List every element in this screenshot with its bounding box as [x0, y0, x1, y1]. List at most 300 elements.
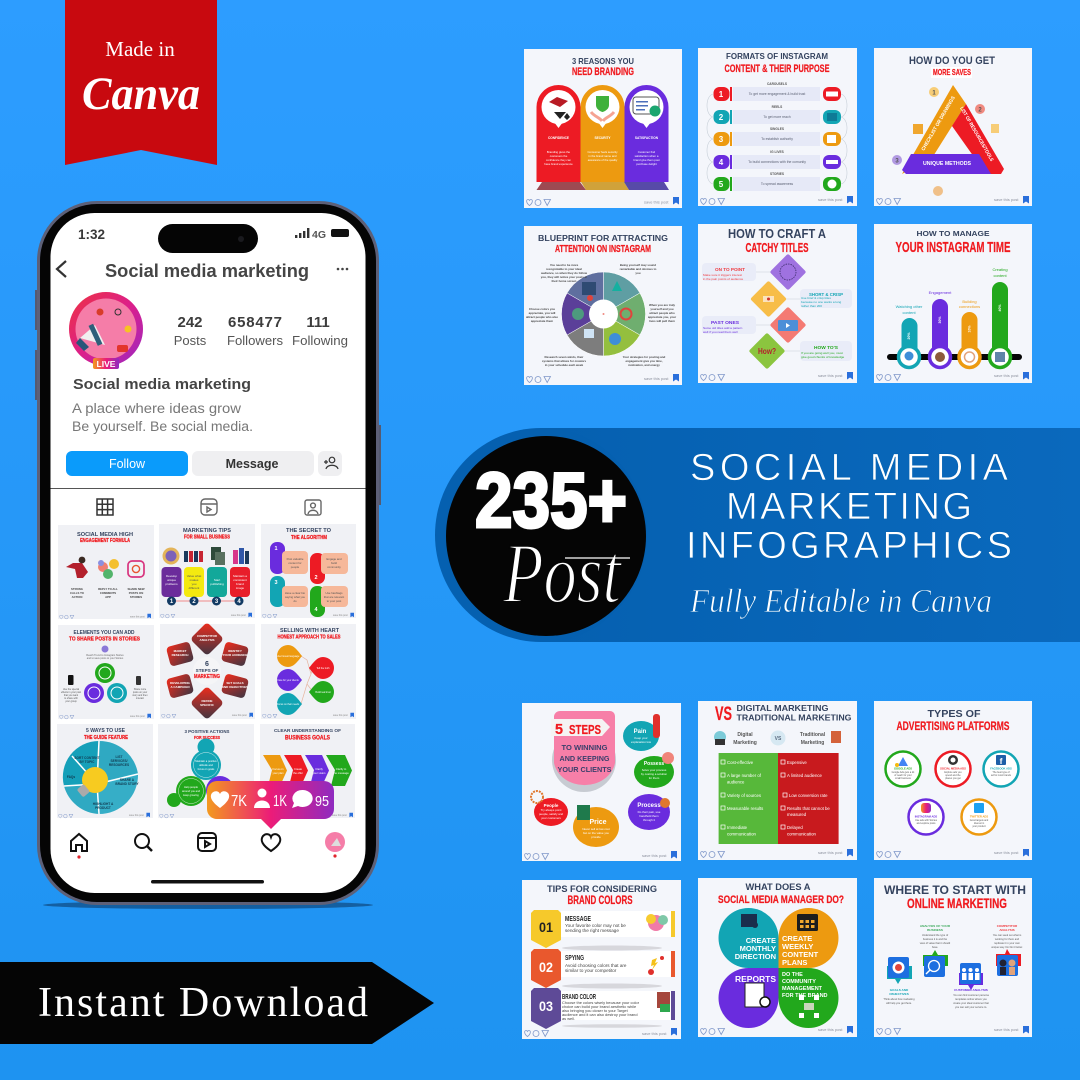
profile buttons: Message: [226, 457, 278, 471]
panel: tips for considering brand colors: 01: [539, 919, 553, 935]
mini post: 6 steps of marketing: MARKETING: [194, 674, 220, 680]
mini post: elements you can add: TO SHARE POSTS IN STORIES: [69, 636, 140, 642]
panel: digital vs traditional marketing: save this post: [818, 850, 843, 855]
panel: how do you get more saves: save this post: [994, 197, 1019, 202]
panel: tips for considering brand colors: 02: [539, 959, 553, 975]
panel: how to craft catchy titles: Make sure it triggers interest: [703, 273, 742, 277]
mini post: the secret to the algorithm: content for: [288, 561, 302, 565]
mini post: social media high engagement: REPLY TO ALL: [98, 587, 118, 591]
bottom navigation: [71, 832, 345, 859]
panel: formats of Instagram content: 5: [719, 180, 724, 189]
panel: 3 reasons you need branding: save this post: [644, 200, 669, 204]
mini post: marketing tips: FOR SMALL BUSINESS: [184, 534, 230, 540]
mini post: 6 steps of marketing: YOUR AUDIENCE: [222, 653, 248, 657]
mini post: 3 positive actions: 3 POSITIVE ACTIONS: [184, 729, 230, 735]
panel: 5 steps winning clients: through it: [643, 818, 655, 822]
panel: 3 reasons you need branding: have brand experience: [544, 162, 573, 166]
panel: formats of Instagram content: 2: [719, 113, 724, 122]
mini post: business goals: BUSINESS GOALS: [285, 736, 330, 742]
mini post: social media high engagement: APP: [105, 595, 111, 599]
panel: 5 steps winning clients: Process: [637, 803, 661, 809]
panel: formats of Instagram content: CONTENT & THEIR PURPOSE: [724, 63, 830, 75]
panel: blueprint for attracting attention: yourself and you: [650, 307, 674, 311]
mini post: 6 steps of marketing: DEVELOPING: [170, 681, 191, 685]
panel: how do you get more saves: CHECKLIST OR DRAWINGS: [921, 95, 957, 152]
avatar: [69, 292, 143, 369]
panel: tips for considering brand colors: BRAND COLOR: [562, 994, 596, 1001]
panel: 5 steps winning clients: Try always point: [541, 808, 562, 812]
panel: where to start with online marketing: create your ideal customer that: [953, 1001, 989, 1005]
panel: tips for considering brand colors: similar to your competitor: [565, 968, 617, 973]
mini post: social media high engagement: SOCIAL MEDIA HIGH: [77, 532, 133, 538]
panel: types of advertising platforms: interest in: [974, 822, 985, 825]
banner title: MARKETING: [726, 486, 972, 528]
panel: types of advertising platforms: GOOGLE ADS: [894, 766, 912, 770]
mini post: the secret to the algorithm: save this post: [333, 614, 348, 617]
panel: formats of Instagram content: STORIES: [770, 172, 784, 176]
panel: digital vs traditional marketing: Expensive: [787, 760, 807, 765]
mini post: the secret to the algorithm: to your post: [327, 599, 342, 603]
profile stats: 111: [306, 314, 330, 331]
panel: blueprint for attracting attention: motivation, and energy: [628, 363, 660, 367]
panel: blueprint for attracting attention: save this post: [644, 376, 669, 381]
panel: how to manage Instagram time: HOW TO MANAGE: [916, 229, 990, 238]
mini post: marketing tips: makes: [190, 578, 199, 582]
panel: how to craft catchy titles: Some old titles add a pattern: [703, 326, 743, 330]
panel: what does a social media manager do: DIRECTION: [735, 952, 776, 961]
mini post: 6 steps of marketing: MARKET: [174, 649, 187, 653]
mini post: the secret to the algorithm: 3: [274, 580, 278, 586]
mini post: the secret to the algorithm: saying what you: [285, 595, 305, 599]
mini post: marketing tips: different: [189, 586, 200, 590]
panel: how to manage Instagram time: save this post: [994, 373, 1019, 378]
panel: digital vs traditional marketing: Marketing: [801, 740, 824, 746]
mini post: 3 positive actions: Maintain a positive: [195, 759, 217, 763]
mini post: 6 steps of marketing: 6: [205, 661, 209, 668]
mini post: elements you can add: Use the special: [63, 688, 80, 691]
profile stats: Posts: [174, 333, 207, 348]
mini post: 6 steps of marketing: SET GOALS: [226, 681, 244, 685]
mini post: 5 ways to use the guide feature: THE GUIDE FEATURE: [84, 735, 128, 741]
panel: where to start with online marketing: WHERE TO START WITH: [884, 885, 1026, 897]
panel: how do you get more saves: [874, 48, 1032, 206]
panel: 5 steps winning clients: Never sell at low cost: [582, 827, 610, 831]
mini post: 3 positive actions: keep growing: [183, 793, 199, 797]
panel: formats of Instagram content: CAROUSELS: [767, 82, 787, 86]
panel: how to manage Instagram time: 40%: [998, 304, 1002, 312]
mini post: the secret to the algorithm: 2: [314, 575, 318, 581]
panel: blueprint for attracting attention: BLUEPRINT FOR ATTRACTING: [538, 234, 668, 243]
mini post: elements you can add: posts on your: [133, 691, 147, 694]
ribbon: Made in Canva: [65, 0, 217, 165]
panel: formats of Instagram content: REELS: [772, 105, 782, 109]
panel: digital vs traditional marketing: Results that cannot be: [787, 806, 830, 811]
panel: how to manage Instagram time: 10%: [968, 325, 972, 333]
panel: how to craft catchy titles: because no one wants a long: [801, 300, 842, 304]
mini post: the secret to the algorithm: Post valuable: [287, 557, 304, 561]
panel: blueprint for attracting attention: lives will pull them: [649, 319, 675, 323]
panel: where to start with online marketing: COMPETITOR: [997, 924, 1018, 928]
panel: tips for considering brand colors: BRAND COLORS: [568, 893, 632, 907]
panel: where to start with online marketing: business it is and the: [923, 937, 948, 941]
panel: 5 steps winning clients: [522, 703, 681, 861]
panel: where to start with online marketing: ONLINE MARKETING: [907, 895, 1007, 911]
mini post: marketing tips: 3: [215, 599, 219, 605]
ribbon: Made in Canva: Made in: [105, 37, 175, 61]
panel: types of advertising platforms: FACEBOOK ADS: [990, 766, 1012, 770]
panel: how to craft catchy titles: If you are going well you, must: [801, 351, 843, 355]
panel: 5 steps winning clients: your customers: [541, 816, 561, 820]
panel: digital vs traditional marketing: Delayed: [787, 825, 803, 830]
banner: instant download arrow: [0, 962, 434, 1044]
mini post: 5 ways to use the guide feature: LIST: [116, 755, 123, 759]
panel: digital vs traditional marketing: DIGITAL MARKETING: [736, 703, 829, 713]
panel: 3 reasons you need branding: purchase delight: [636, 162, 657, 166]
mini post: 5 ways to use the guide feature: PRODUCT: [95, 806, 111, 810]
badge: 235+ post: [446, 436, 646, 636]
panel: blueprint for attracting attention: appreciate you, your: [648, 315, 677, 319]
mini post: the secret to the algorithm: do: [293, 599, 297, 603]
panel: types of advertising platforms: of reach for your: [894, 774, 912, 777]
mini post: 5 ways to use the guide feature: RESOURCES: [109, 763, 129, 767]
panel: digital vs traditional marketing: Traditional: [800, 732, 826, 738]
mini post: business goals: the offer: [293, 771, 303, 775]
engagement popup: 7K: [231, 793, 247, 810]
phone mockup: [35, 201, 381, 909]
panel: tips for considering brand colors: TIPS FOR CONSIDERING: [547, 884, 657, 894]
mini post: marketing tips: save this post: [231, 614, 246, 617]
mini post: marketing tips: [159, 524, 255, 618]
panel: types of advertising platforms: save this post: [994, 850, 1019, 855]
panel: how to manage Instagram time: 20%: [907, 332, 911, 340]
panel: where to start with online marketing: save this post: [994, 1027, 1019, 1032]
panel: blueprint for attracting attention: attract people who: [649, 311, 675, 315]
panel: digital vs traditional marketing: Marketing: [733, 740, 757, 746]
mini post: the secret to the algorithm: THE ALGORITHM: [291, 535, 327, 541]
panel: what does a social media manager do: CONTENT: [782, 950, 819, 959]
mini post: the secret to the algorithm: build: [331, 561, 337, 565]
panel: blueprint for attracting attention: You need to be more: [550, 263, 579, 267]
mini post: elements you can add: story and then: [132, 694, 148, 697]
mini post: marketing tips: brand: [236, 582, 244, 586]
mini post: elements you can add: Reach Trend to Instagram Stories: [86, 654, 124, 657]
status bar: [78, 224, 349, 253]
mini post: marketing tips: you: [192, 582, 197, 586]
panel: 5 steps winning clients: but on the value you: [583, 831, 609, 835]
panel: 3 reasons you need branding: Branding gives the: [547, 150, 571, 154]
mini post: the secret to the algorithm: Have a clear bio: [285, 591, 306, 595]
ribbon: Made in Canva: Canva: [82, 68, 200, 120]
mini post: 6 steps of marketing: DEFINE: [201, 699, 213, 703]
panel: blueprint for attracting attention: remarkable and obvious to: [620, 267, 657, 271]
mini post: selling with heart: Care for your clients: [277, 679, 299, 682]
panel: types of advertising platforms: The best type of: [992, 771, 1010, 774]
mini post: the secret to the algorithm: that are relevant: [324, 595, 344, 599]
panel: where to start with online marketing: You can seek out what is: [993, 933, 1022, 937]
panel: types of advertising platforms: ad for most brands: [991, 774, 1012, 777]
panel: where to start with online marketing: unique way. Do Do it better.: [991, 945, 1023, 949]
panel: formats of Instagram content: To get more engagement & build trust: [749, 92, 805, 96]
mini post: 3 positive actions: FOR SUCCESS: [194, 735, 221, 741]
panel: 5 steps winning clients: people, satisfy and: [539, 812, 563, 816]
panel: where to start with online marketing: view of value that it should: [920, 941, 951, 945]
panel: digital vs traditional marketing: Measurable results: [727, 806, 763, 811]
panel: tips for considering brand colors: sending the right message: [565, 928, 619, 933]
panel: where to start with online marketing: working for them and: [995, 937, 1020, 941]
panel: tips for considering brand colors: SPYING: [565, 955, 584, 962]
panel: digital vs traditional marketing: Digital: [737, 732, 753, 738]
mini post: 6 steps of marketing: STEPS OF: [196, 668, 219, 673]
mini post: business goals: CLEAR UNDERSTANDING OF: [274, 728, 341, 734]
mini post: social media high engagement: SHARE NEW: [127, 587, 145, 591]
panel: 5 steps winning clients: People: [544, 803, 559, 808]
panel: types of advertising platforms: ADVERTISING PLATFORMS: [896, 719, 1010, 733]
panel: what does a social media manager do: SOCIAL MEDIA MANAGER DO?: [718, 894, 844, 906]
panel: how to manage Instagram time: 30%: [938, 316, 942, 324]
panel: how to craft catchy titles: rather than 200: [801, 304, 822, 308]
panel: types of advertising platforms: [874, 701, 1032, 860]
panel: 3 reasons you need branding: SATISFACTION: [635, 136, 659, 140]
panel: what does a social media manager do: MANAGEMENT: [782, 986, 823, 992]
panel: how to craft catchy titles: CATCHY TITLES: [746, 241, 808, 255]
mini post: the secret to the algorithm: people: [291, 565, 300, 569]
mini post: business goals: your plan: [272, 771, 284, 775]
mini post: 5 ways to use the guide feature: SHARE A: [120, 778, 135, 782]
panel: 3 reasons you need branding: 3 REASONS YOU: [572, 56, 634, 66]
panel: types of advertising platforms: Explore ads you: [944, 771, 962, 774]
mini post: the secret to the algorithm: Engage and: [326, 557, 342, 561]
panel: types of advertising platforms: TWITTER ADS: [970, 814, 988, 818]
panel: how do you get more saves: 1: [932, 90, 936, 96]
banner: instant download arrow: Instant Download: [38, 980, 368, 1026]
mini post: 3 positive actions: attitude and: [199, 763, 213, 767]
panel: digital vs traditional marketing: TRADITIONAL MARKETING: [736, 712, 852, 722]
profile stats: [174, 314, 348, 348]
panel: what does a social media manager do: PLANS: [782, 958, 807, 967]
panel: tips for considering brand colors: Your favorite color may not be: [565, 923, 626, 928]
panel: how to craft catchy titles: well if you read them well: [703, 330, 738, 334]
panel: how do you get more saves: MORE SAVES: [933, 67, 971, 77]
mini post: 6 steps of marketing: A CAMPAIGN: [170, 685, 190, 689]
mini post: business goals: Focus on: [272, 767, 284, 771]
panel: what does a social media manager do: WEEKLY: [782, 942, 813, 951]
panel: digital vs traditional marketing: A large number of: [727, 773, 762, 778]
mini post: 5 ways to use the guide feature: HIGHLIGHT A: [93, 802, 114, 806]
panel: how do you get more saves: 2: [978, 108, 982, 114]
phone body: [35, 201, 381, 909]
panel: 5 steps winning clients: for them: [649, 776, 660, 780]
banner title: SOCIAL MEDIA: [690, 447, 1009, 489]
panel: 5 steps winning clients: YOUR CLIENTS: [558, 765, 612, 774]
panel: how to craft catchy titles: ON TO POINT: [715, 267, 745, 272]
panel: how to manage Instagram time: [874, 224, 1032, 383]
panel: 5 steps winning clients: TO WINNING: [562, 743, 608, 752]
panel: tips for considering brand colors: save this post: [642, 1031, 667, 1036]
mini post: social media high engagement: COMMENTS: [100, 591, 116, 595]
panel: where to start with online marketing: OBJECTIVES: [889, 992, 909, 996]
mini post: business goals: Clarify: [315, 767, 323, 771]
panel: formats of Instagram content: 3: [719, 135, 724, 144]
mini post: elements you can add: to share with: [64, 697, 78, 700]
panel: how to craft catchy titles: SHORT & CRISP: [809, 292, 843, 297]
panel: formats of Instagram content: save this post: [818, 197, 843, 202]
panel: tips for considering brand colors: Choose the colors wisely because your color: [562, 1000, 640, 1005]
panel: types of advertising platforms: TYPES OF: [928, 708, 981, 720]
panel: what does a social media manager do: MONTHLY: [740, 944, 776, 953]
badge: 235+ post: 235+: [475, 456, 627, 544]
panel: how to manage Instagram time: content: [993, 273, 1007, 278]
mini post: 5 ways to use the guide feature: BY TOPIC: [80, 760, 95, 764]
status bar: 1:32: [78, 227, 105, 242]
mini post: elements you can add: that you want: [64, 694, 78, 697]
panel: how to manage Instagram time: Building: [962, 299, 977, 304]
mini post: business goals: your vision: [313, 771, 326, 775]
panel: where to start with online marketing: You can find customer persona: [953, 993, 989, 997]
mini post: 3 positive actions: save this post: [230, 814, 245, 817]
panel: 5 steps winning clients: handhold them: [639, 814, 659, 818]
panel: digital vs traditional marketing: VS: [775, 736, 782, 742]
mini post: marketing tips: unique: [167, 578, 176, 582]
panel: 5 steps winning clients: Pain: [634, 729, 647, 735]
panel: digital vs traditional marketing: Variety of sources: [727, 793, 761, 798]
mini post: marketing tips: publishing: [210, 582, 224, 586]
panel: blueprint for attracting attention: When you are truly: [649, 303, 675, 307]
banner subtitle: Fully Editable in Canva: [689, 583, 992, 620]
panel: 3 reasons you need branding: in the brand name and: [588, 154, 617, 158]
mini post: 3 positive actions: Help people: [184, 785, 198, 789]
panel: blueprint for attracting attention: audience, so when they do follow: [541, 271, 588, 275]
panel: where to start with online marketing: will help you get there.: [886, 1001, 912, 1005]
banner: black badge and title: [435, 428, 1080, 642]
mini post: elements you can add: and to save posts to your Stories: [87, 657, 124, 660]
panel: 5 steps winning clients: by costing a solution: [641, 772, 667, 776]
engagement popup: [207, 781, 334, 829]
panel: blueprint for attracting attention: Research seven winds, their: [545, 355, 584, 359]
panel: tips for considering brand colors: as well.: [562, 1016, 575, 1021]
panel: types of advertising platforms: places you get: [945, 777, 961, 780]
mini post: marketing tips: Start: [214, 578, 220, 582]
mini post: elements you can add: your group: [65, 700, 77, 703]
panel: types of advertising platforms: Google Ads gets a lot: [892, 771, 915, 774]
panel: what does a social media manager do: save this post: [818, 1027, 843, 1032]
panel: where to start with online marketing: BUSINESS: [927, 928, 943, 932]
panel: blueprint for attracting attention: recognizable to your ideal: [546, 267, 582, 271]
mini post: 5 ways to use the guide feature: BRAND STORY: [115, 782, 139, 786]
panel: tips for considering brand colors: also bringing you closer to your Target: [562, 1008, 629, 1013]
mini post: 6 steps of marketing: SPECIFIC: [200, 703, 215, 707]
panel: how do you get more saves: HOW DO YOU GET: [909, 55, 995, 67]
panel: how to craft catchy titles: HOW TO'S: [814, 345, 838, 350]
panel: what does a social media manager do: FOR THE BRAND: [782, 993, 828, 999]
banner band: [435, 428, 1080, 642]
mini post: selling with heart: Tell the truth: [316, 667, 330, 670]
panel: formats of Instagram content: FORMATS OF INSTAGRAM: [726, 52, 828, 61]
mini post: business goals: Clarify in: [336, 767, 347, 771]
panel: 3 reasons you need branding: SECURITY: [594, 136, 611, 140]
mini post: the secret to the algorithm: 1: [274, 546, 278, 552]
panel: 5 steps winning clients: STEPS: [569, 722, 601, 737]
mini post: 3 positive actions: around you and: [182, 789, 201, 793]
profile bio: A place where ideas grow: [72, 401, 241, 416]
mini post: 5 ways to use the guide feature: 5 WAYS TO USE: [86, 728, 125, 734]
panel: how do you get more saves: 3: [895, 158, 899, 164]
mini post: 5 ways to use the guide feature: SORT CONTENT: [74, 756, 100, 760]
panel: types of advertising platforms: SOCIAL MEDIA ADS: [940, 766, 966, 770]
mini post: elements you can add: save this post: [130, 715, 145, 718]
panel: how to manage Instagram time: Engagement: [929, 290, 952, 295]
panel: 5 steps winning clients: save this post: [642, 853, 667, 858]
panel: 3 reasons you need branding: Consumer feels security: [588, 150, 618, 154]
panel: blueprint for attracting attention: appreciate them: [531, 319, 554, 323]
mini post: 5 ways to use the guide feature: save this post: [129, 814, 144, 817]
panel: where to start with online marketing: ANALYSIS: [999, 928, 1015, 932]
mini post: elements you can add: effects in your post: [61, 691, 81, 694]
mini post: 3 positive actions: [158, 724, 254, 818]
panel: blueprint for attracting attention: ATTENTION ON INSTAGRAM: [555, 244, 651, 255]
panel: 5 steps winning clients: AND KEEPING: [560, 754, 610, 763]
banner title: [686, 447, 1012, 567]
mini post: elements you can add: Share more: [134, 688, 147, 691]
mini post: 6 steps of marketing: IDENTIFY: [228, 649, 242, 653]
panel: digital vs traditional marketing: [698, 701, 857, 860]
panel: how do you get more saves: UNIQUE METHODS: [923, 161, 971, 167]
panel: 3 reasons you need branding: Customer find: [638, 150, 656, 154]
panel: 5 steps winning clients: explanation low: [631, 740, 652, 744]
panel: digital vs traditional marketing: communication: [787, 832, 817, 836]
panel: blueprint for attracting attention: in your schedule each week: [545, 363, 584, 367]
panel: formats of Instagram content: [698, 48, 857, 206]
panel: 5 steps winning clients: Do their pain, use: [638, 810, 661, 814]
donut chart: [561, 272, 646, 356]
panel: how to craft catchy titles: How?: [758, 346, 776, 356]
panel: formats of Instagram content: To spread awareness: [761, 182, 793, 186]
mini post: selling with heart: save this post: [333, 714, 348, 717]
badge: 235+ post: Post: [502, 525, 623, 621]
profile buttons: [66, 451, 342, 476]
mini post: marketing tips: Maintain a: [233, 574, 247, 578]
panel: blueprint for attracting attention: appreciate, you will: [529, 311, 556, 315]
panel: formats of Instagram content: SINGLES: [770, 127, 784, 131]
panel: types of advertising platforms: INSTAGRAM ADS: [915, 814, 937, 818]
panel: formats of Instagram content: IG LIVES: [770, 150, 784, 154]
panel: 3 reasons you need branding: CONFIDENCE: [548, 136, 569, 140]
panel: formats of Instagram content: 4: [719, 158, 724, 167]
panel: formats of Instagram content: To build connections with the comunity: [748, 160, 806, 164]
panel: blueprint for attracting attention: you, they will notice your posts in: [541, 275, 587, 279]
panel: blueprint for attracting attention: their home screen: [552, 279, 577, 283]
panel: formats of Instagram content: 1: [719, 90, 724, 99]
panel: digital vs traditional marketing: VS: [715, 704, 732, 725]
profile stats: 658477: [228, 314, 282, 331]
panel: where to start with online marketing: ANALYSIS OF YOUR: [920, 924, 951, 928]
panel: blueprint for attracting attention: Your strategies for posting and: [623, 355, 666, 359]
panel: blueprint for attracting attention: engagement give you time,: [625, 359, 663, 363]
panel: tips for considering brand colors: 03: [539, 998, 553, 1014]
panel: where to start with online marketing: CUSTOMER ANALYSIS: [954, 988, 988, 992]
panel: what does a social media manager do: CREATE: [782, 934, 812, 943]
mini post: 6 steps of marketing: AND OBJECTIVES: [222, 685, 248, 689]
mini post: selling with heart: Focus on their needs: [277, 703, 300, 706]
mini post: selling with heart: Use honest language: [277, 655, 300, 658]
panel: 3 reasons you need branding: customers the: [550, 154, 568, 158]
panel: where to start with online marketing: Think about how marketing: [883, 997, 915, 1001]
panel: types of advertising platforms: spend and the: [945, 774, 961, 777]
panel: 5 steps winning clients: provide: [591, 835, 601, 839]
mini post: elements you can add: [58, 625, 154, 719]
panel: blueprint for attracting attention: Being yourself may sound: [620, 263, 656, 267]
mini post: marketing tips: problems: [165, 582, 178, 586]
mini post: social media high engagement: STORIES: [130, 595, 142, 599]
